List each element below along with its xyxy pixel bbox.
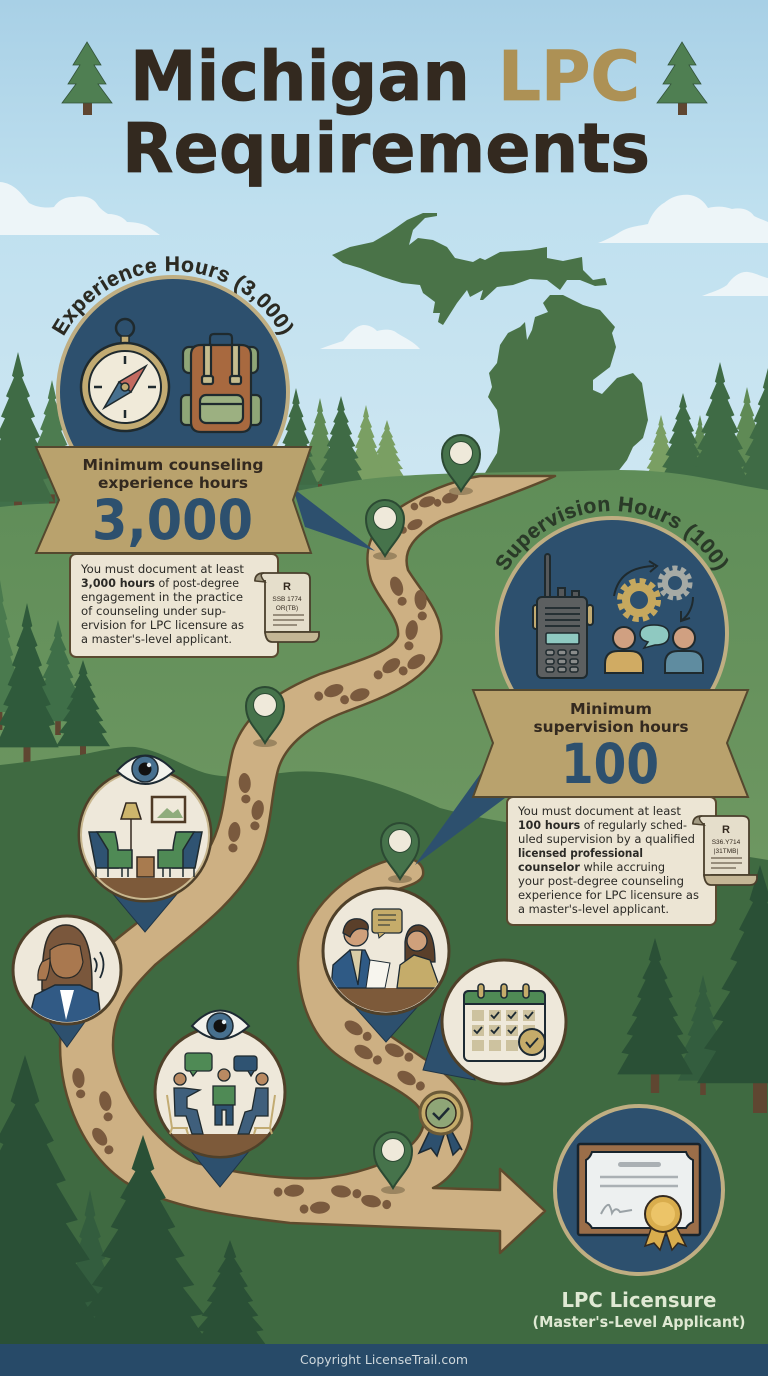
light green hills bbox=[0, 470, 768, 900]
cloud: upper left bbox=[0, 182, 160, 235]
icon: walkie-talkie bbox=[533, 554, 593, 678]
title: Michigan bbox=[130, 37, 470, 117]
pin marker: supervision callout bbox=[381, 823, 419, 883]
man in suit bbox=[331, 919, 372, 988]
sky background bbox=[0, 0, 768, 520]
three seated people bbox=[167, 1069, 275, 1134]
side table bbox=[137, 857, 154, 877]
description card: You must document at least bbox=[80, 562, 244, 576]
speech bubbles bbox=[185, 1053, 257, 1076]
goal label: LPC Licensure bbox=[562, 1288, 716, 1312]
background trees bbox=[0, 352, 768, 522]
icon: eye bbox=[192, 1010, 249, 1039]
circular badge background bbox=[497, 518, 727, 748]
description card: experience for LPC licensure as bbox=[518, 888, 699, 902]
icon: statute scroll: R bbox=[722, 824, 730, 836]
description card: 3,000 hours of post-degree bbox=[81, 576, 239, 590]
background tree mounds bbox=[0, 440, 768, 520]
ribbon banner bbox=[36, 447, 311, 553]
cloud: small centre bbox=[320, 325, 420, 349]
icon: statute scroll: |31TMB| bbox=[714, 848, 738, 855]
description card bbox=[507, 797, 716, 925]
banner label: supervision hours bbox=[534, 718, 688, 736]
icon: two people talking bbox=[605, 625, 703, 673]
description card bbox=[70, 554, 278, 657]
icon: statute scroll bbox=[255, 573, 319, 642]
icon: award ribbon badge bbox=[419, 1092, 462, 1156]
scene: calendar bbox=[423, 960, 566, 1084]
icon: statute scroll: S36.Y714 bbox=[712, 839, 741, 846]
armchair right bbox=[158, 832, 202, 877]
woman on phone bbox=[31, 924, 104, 1022]
banner label bbox=[534, 700, 688, 736]
icon: gold seal bbox=[645, 1196, 686, 1250]
description card: a master's-level applicant. bbox=[81, 632, 232, 646]
curved heading: Supervision Hours (100) bbox=[496, 496, 728, 570]
icon: eye bbox=[117, 756, 174, 784]
icon: backpack bbox=[181, 334, 261, 432]
footer bar: Copyright LicenseTrail.com bbox=[300, 1353, 468, 1367]
icon: framed certificate bbox=[578, 1144, 700, 1235]
callout pointer to pin bbox=[415, 770, 505, 865]
description card: a master's-level applicant. bbox=[518, 902, 669, 916]
goal label: (Master's-Level Applicant) bbox=[532, 1313, 746, 1331]
icon: calendar with checkmarks bbox=[464, 984, 545, 1061]
statistic: 3,000: 3,000 bbox=[92, 488, 253, 552]
ribbon banner bbox=[473, 690, 748, 797]
cloud: upper right bbox=[598, 195, 768, 243]
footer bar bbox=[0, 1344, 768, 1376]
banner label: Minimum bbox=[570, 700, 652, 718]
icon: gears bbox=[614, 561, 693, 621]
midground trees bbox=[0, 580, 110, 767]
armchair left bbox=[89, 832, 132, 877]
scene: group supervision bbox=[154, 1010, 286, 1187]
winding trail with arrow bbox=[60, 476, 555, 1253]
banner label: experience hours bbox=[98, 474, 248, 492]
title: Requirements bbox=[122, 109, 650, 189]
description card: licensed professional bbox=[518, 846, 643, 860]
description card: engagement in the practice bbox=[81, 590, 243, 604]
footprints along trail bbox=[71, 490, 460, 1215]
banner label: Minimum counseling bbox=[82, 456, 264, 474]
picture frame bbox=[152, 797, 185, 822]
description card: You must document at least bbox=[517, 804, 681, 818]
map of Michigan bbox=[332, 213, 648, 478]
description card: of counseling under sup- bbox=[81, 604, 226, 618]
woman bbox=[397, 925, 440, 988]
icon: statute scroll: SSB 1774 bbox=[272, 596, 302, 603]
circular badge background bbox=[555, 1106, 723, 1274]
pin marker: top of trail bbox=[442, 435, 480, 495]
icon: statute scroll: OR(TB) bbox=[276, 605, 298, 612]
scene: counseling office bbox=[78, 756, 212, 932]
callout pointer to pin bbox=[293, 488, 375, 551]
circular badge background bbox=[58, 277, 288, 507]
floor lamp bbox=[121, 803, 141, 857]
curved heading: Experience Hours (3,000) bbox=[52, 256, 294, 336]
banner label bbox=[82, 456, 264, 492]
scene: supervisor and counselor meeting bbox=[320, 888, 452, 1042]
panel: supervision hours bbox=[415, 496, 758, 926]
cloud: small right bbox=[702, 272, 768, 296]
description card: 100 hours of regularly sched- bbox=[518, 818, 687, 832]
description card: uled supervision by a qualified bbox=[518, 832, 695, 846]
dark green foreground ground bbox=[0, 747, 768, 1376]
panel: experience hours bbox=[34, 256, 375, 658]
title: LPC bbox=[498, 37, 640, 117]
icon: title tree left bbox=[62, 42, 112, 115]
icon: compass bbox=[81, 319, 169, 431]
scene: phone consultation bbox=[13, 916, 121, 1047]
statistic: 100: 100 bbox=[561, 732, 659, 796]
paper bbox=[366, 960, 390, 988]
description card: counselor while accruing bbox=[518, 860, 665, 874]
description card: ervision for LPC licensure as bbox=[81, 618, 244, 632]
pin marker: middle trail bbox=[246, 687, 284, 747]
foreground trees bbox=[0, 865, 768, 1376]
speech bubble bbox=[372, 909, 402, 938]
icon: statute scroll bbox=[693, 816, 757, 885]
description card: your post-degree counseling bbox=[518, 874, 684, 888]
panel: LPC licensure goal bbox=[532, 1106, 746, 1331]
pin marker: bottom of trail bbox=[374, 1132, 412, 1194]
pin marker: experience callout bbox=[366, 500, 404, 560]
icon: statute scroll: R bbox=[283, 581, 291, 593]
icon: title tree right bbox=[657, 42, 707, 115]
goal label bbox=[532, 1288, 746, 1331]
title bbox=[122, 37, 650, 189]
